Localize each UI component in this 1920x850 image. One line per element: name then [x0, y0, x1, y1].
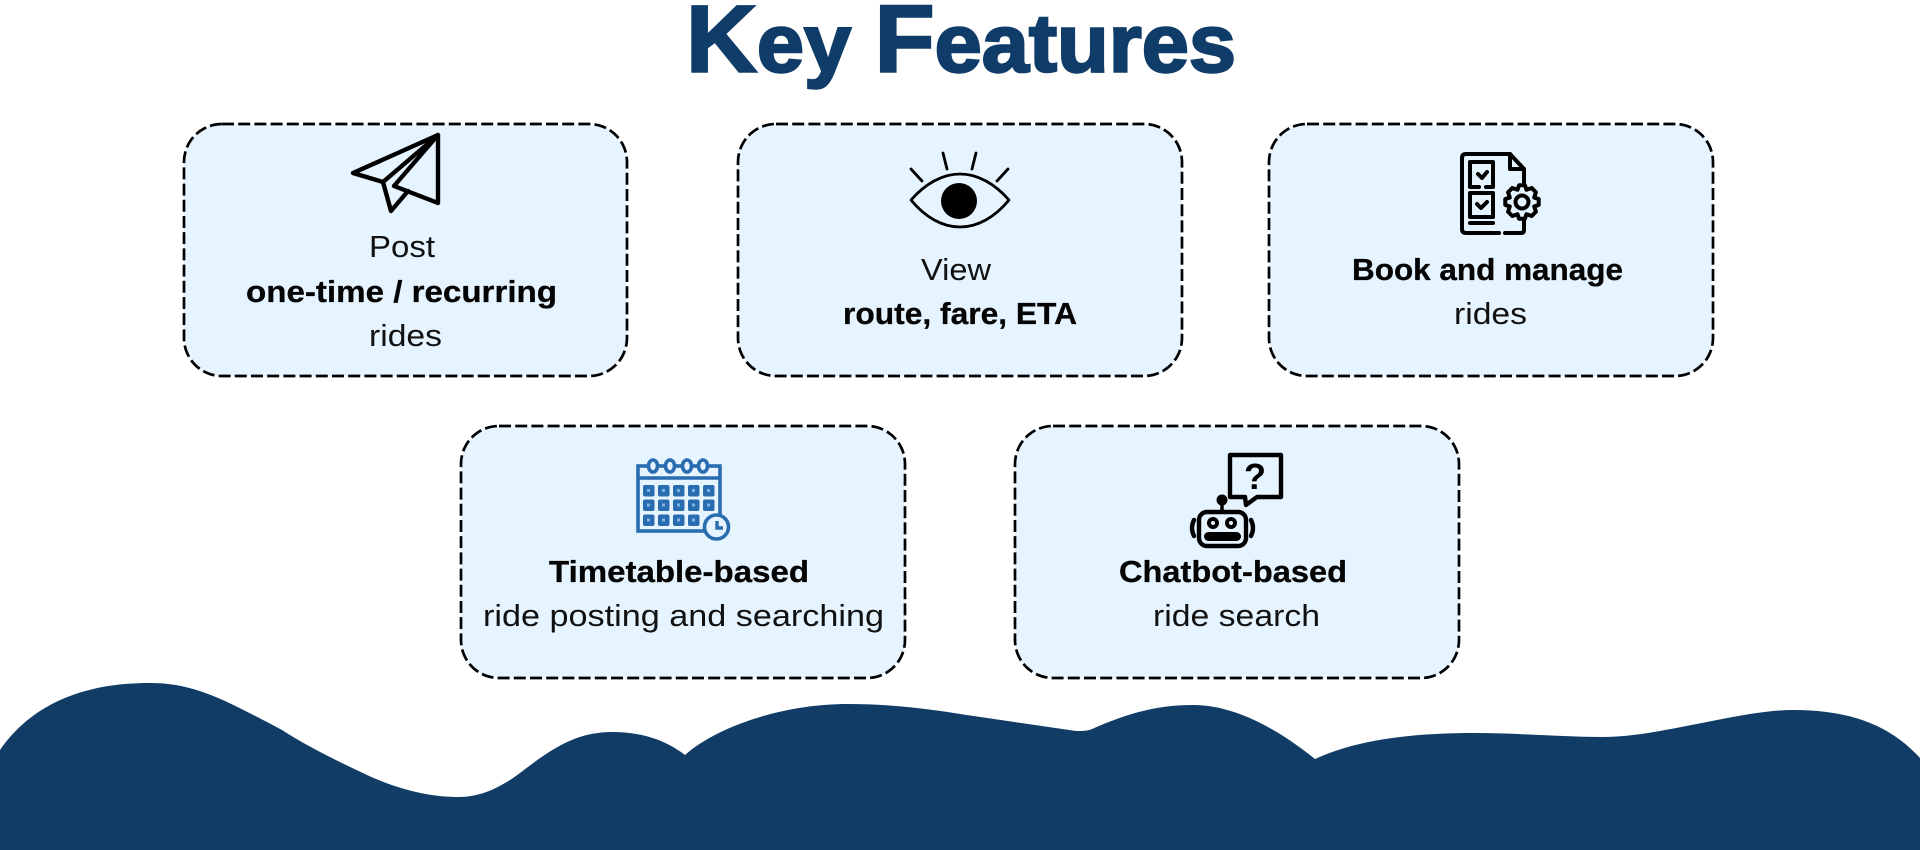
panel: view route — [738, 124, 1182, 376]
text: timetable-based ride posting and searching — [483, 554, 884, 633]
text: view route, fare, ETA — [843, 252, 1077, 331]
text: timetable-based ride posting and searching: ride posting and searching — [483, 598, 884, 633]
text: post one-time / recurring rides: Post — [369, 229, 435, 264]
text: post one-time / recurring rides: one-time / recurring — [246, 274, 557, 309]
icon: checklist document with gear — [1462, 154, 1539, 233]
navy wave footer — [0, 683, 1920, 850]
panel: chatbot-based — [1015, 426, 1459, 678]
text: book and manage rides: Book and manage — [1352, 252, 1623, 287]
panel: timetable-based — [461, 426, 905, 678]
icon: calendar with clock — [637, 460, 728, 539]
text: post one-time / recurring rides: rides — [369, 318, 442, 353]
text: book and manage rides: rides — [1454, 296, 1527, 331]
panel: book and manage — [1269, 124, 1713, 376]
text: chatbot-based ride search: ride search — [1153, 598, 1320, 633]
text: timetable-based ride posting and searching: Timetable-based — [549, 554, 809, 589]
text: post one-time / recurring rides — [246, 229, 557, 353]
panel: post rides — [184, 124, 627, 376]
icon: eye — [911, 153, 1009, 227]
text: view route, fare, ETA: View — [921, 252, 992, 287]
text: chatbot-based ride search: Chatbot-based — [1119, 554, 1347, 589]
icon: robot with question bubble: ? — [1244, 456, 1266, 497]
text: chatbot-based ride search — [1119, 554, 1347, 633]
icon: robot with question bubble — [1192, 455, 1281, 546]
text: view route, fare, ETA: route, fare, ETA — [843, 296, 1077, 331]
text: book and manage rides — [1352, 252, 1623, 331]
icon: paper plane — [353, 135, 438, 211]
